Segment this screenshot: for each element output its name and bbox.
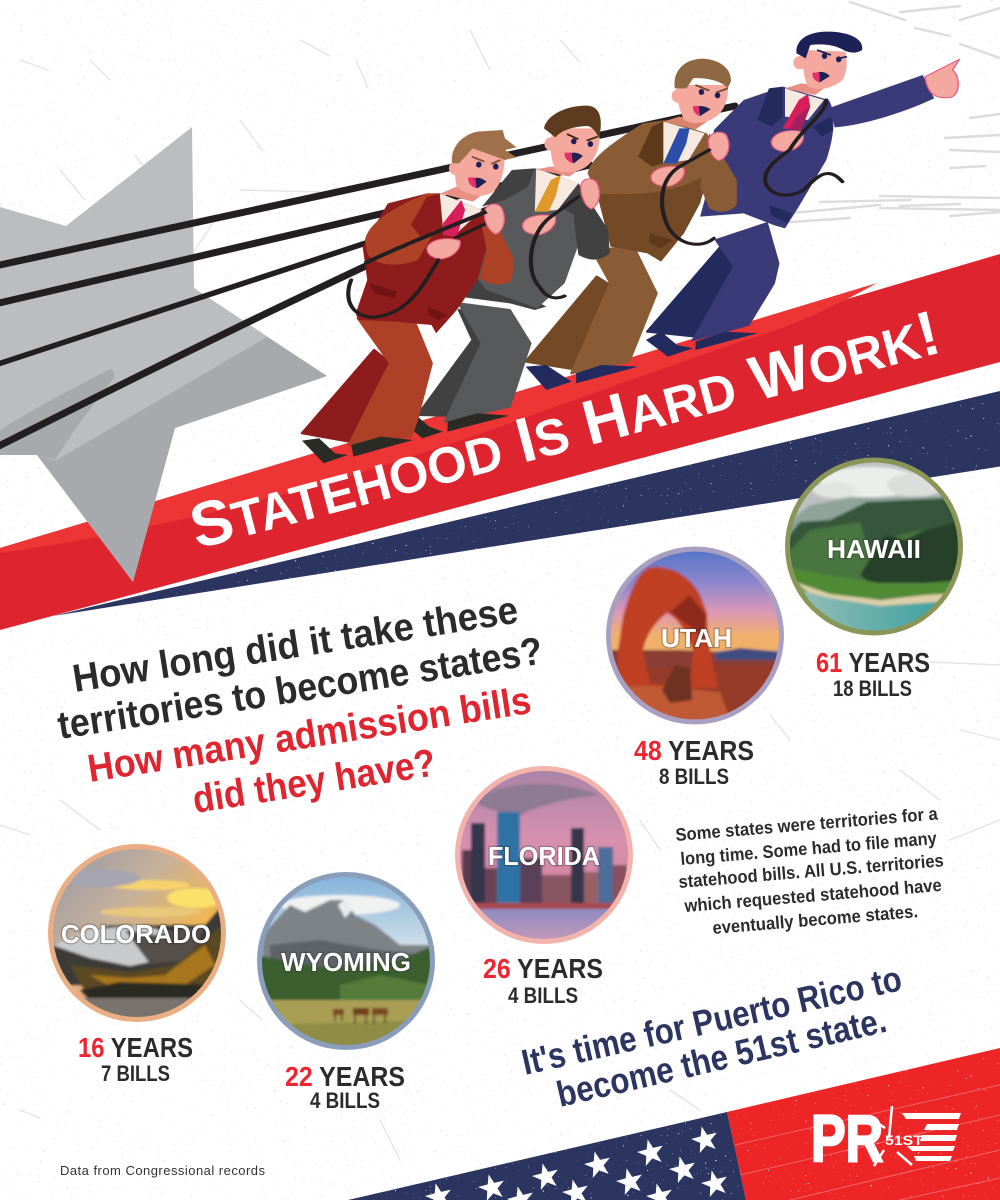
label: Wyoming: WYOMING bbox=[281, 947, 411, 977]
flag navy canton with stars bbox=[348, 1112, 746, 1200]
label: Hawaii: HAWAII bbox=[827, 534, 921, 564]
photo: Wyoming bbox=[257, 872, 437, 1052]
photo: Florida bbox=[455, 766, 635, 945]
man 4: navy suit bbox=[646, 32, 959, 357]
stat: Wyoming bills: 4 BILLS bbox=[310, 1088, 380, 1113]
tow ropes bbox=[0, 106, 735, 448]
question line 3: How many admission bills bbox=[85, 679, 534, 791]
explanatory paragraph bbox=[675, 803, 944, 938]
flag red field bbox=[727, 1048, 1000, 1200]
star shaded faces bbox=[37, 337, 327, 582]
explanatory paragraph: Some states were territories for a bbox=[675, 803, 939, 845]
label: Utah: UTAH bbox=[661, 623, 732, 653]
label: Colorado: COLORADO bbox=[61, 919, 211, 949]
logo: PR 51st bbox=[811, 1101, 961, 1175]
stat: Colorado bills: 7 BILLS bbox=[101, 1061, 170, 1086]
stat: Hawaii years: 61 YEARS bbox=[816, 647, 930, 678]
banner title: STATEHOOD IS HARD WORK! bbox=[183, 298, 947, 563]
explanatory paragraph: long time. Some had to file many bbox=[680, 828, 937, 869]
logo PR letters: PR bbox=[811, 1101, 883, 1175]
man 2: grey suit bbox=[406, 106, 610, 438]
stat: Colorado years: 16 YEARS bbox=[78, 1032, 193, 1063]
question line 1: How long did it take these bbox=[70, 589, 521, 701]
question line 2: territories to become states? bbox=[55, 630, 545, 748]
call to action line 2: become the 51st state. bbox=[553, 999, 890, 1115]
stat: Hawaii bills: 18 BILLS bbox=[833, 676, 912, 701]
logo 51ST: 51ST bbox=[885, 1132, 924, 1148]
logo starburst bbox=[870, 1106, 912, 1166]
red banner bbox=[0, 254, 1000, 630]
banner highlight bbox=[0, 283, 877, 553]
stat: Florida bills: 4 BILLS bbox=[508, 983, 578, 1008]
stat: Florida years: 26 YEARS bbox=[483, 953, 603, 984]
navy stripe bbox=[54, 391, 1000, 616]
question line 4: did they have? bbox=[190, 742, 438, 822]
stat: Wyoming years: 22 YEARS bbox=[285, 1061, 405, 1092]
explanatory paragraph: statehood bills. All U.S. territories bbox=[678, 850, 944, 892]
star swoosh shading bbox=[0, 370, 114, 460]
photo: Colorado bbox=[48, 844, 228, 1028]
star being pulled bbox=[0, 127, 327, 582]
man 1: red suit bbox=[302, 130, 516, 463]
data source note: Data from Congressional records bbox=[60, 1163, 266, 1178]
logo stripes bbox=[902, 1113, 961, 1161]
explanatory paragraph: which requested statehood have bbox=[683, 875, 942, 916]
call to action line 1: It's time for Puerto Rico to bbox=[518, 958, 905, 1083]
explanatory paragraph: eventually become states. bbox=[712, 901, 919, 938]
label: Florida: FLORIDA bbox=[488, 841, 600, 871]
photo: Hawaii bbox=[785, 458, 970, 640]
footer flag bbox=[340, 1040, 1000, 1200]
question heading bbox=[55, 589, 545, 822]
stat: Utah bills: 8 BILLS bbox=[659, 764, 729, 789]
man 3: brown suit bbox=[526, 59, 737, 390]
four men pulling the star bbox=[302, 32, 959, 463]
stat: Utah years: 48 YEARS bbox=[634, 735, 754, 766]
star light faces bbox=[0, 127, 327, 582]
call to action bbox=[518, 958, 905, 1115]
photo: Utah bbox=[606, 546, 786, 730]
